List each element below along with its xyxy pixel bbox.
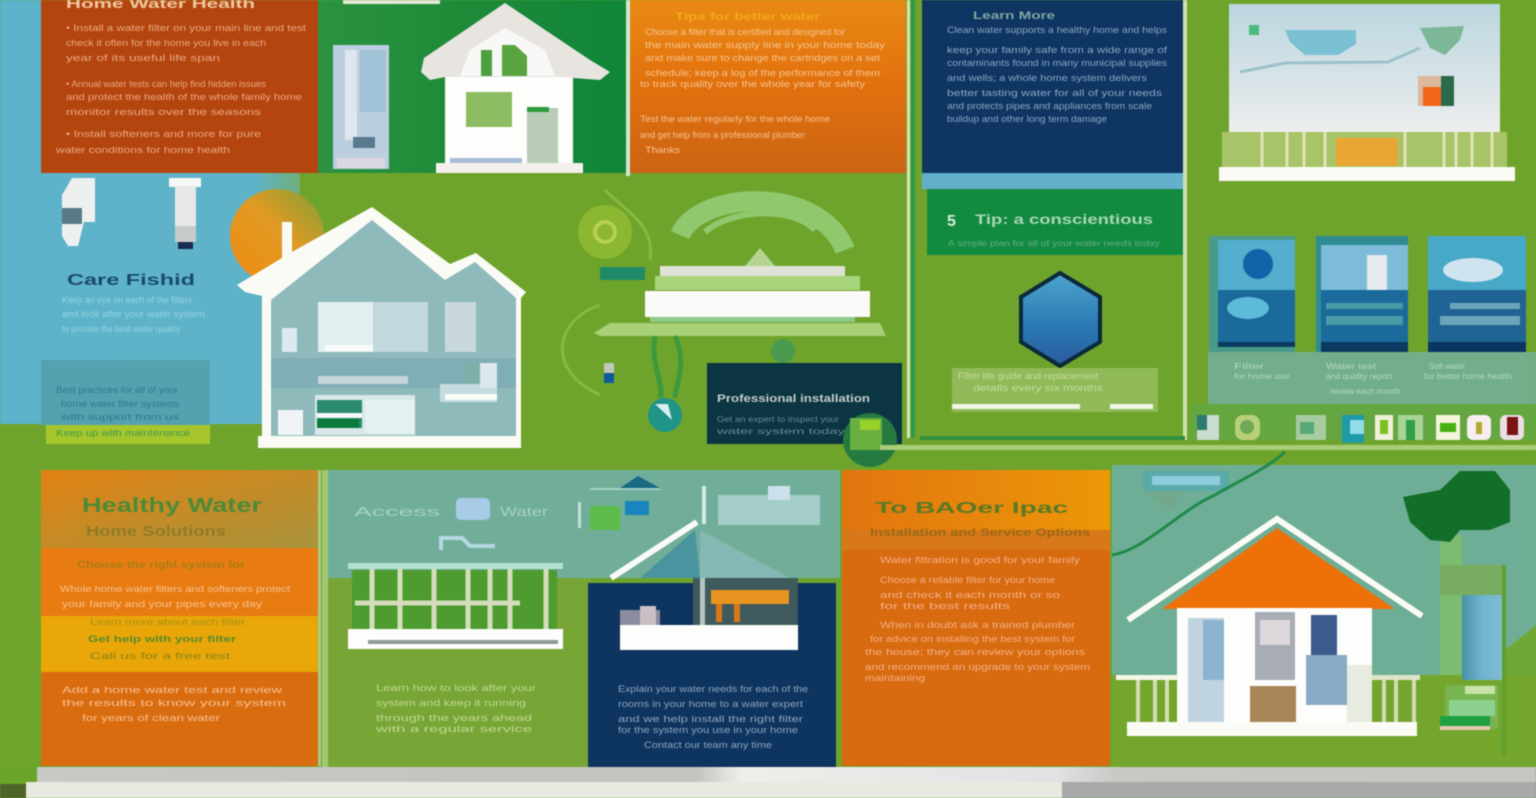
text: top orange: Choose a filter that is certified and designed for <box>645 27 845 37</box>
panel: dark callout: water system today <box>715 427 845 436</box>
panel: left blue <box>41 178 210 444</box>
icon: list <box>1296 415 1326 440</box>
heading: bottom orange right: To BAOer Ipac <box>875 500 1068 517</box>
panel: bottom orange left: Add a home water test and review <box>62 685 283 695</box>
icon: big translucent house <box>237 207 526 448</box>
panel: bottom orange right: When in doubt ask a trained plumber <box>880 620 1075 630</box>
box: notes: Best practices for all of your <box>56 385 178 395</box>
box: notes: with support from us <box>60 412 180 422</box>
icon: water tank <box>1440 565 1506 755</box>
heading: left blue: Care Fishid <box>67 272 195 289</box>
text: top orange: Tips for better water <box>675 11 821 23</box>
captions under cards: Filter <box>1234 362 1265 371</box>
panel: top red: year of its useful life span <box>66 53 220 63</box>
text: top orange: to track quality over the whole year for safety <box>640 79 866 89</box>
panel: bottom orange right: Choose a reliable filter for your home <box>880 575 1055 585</box>
panel: bottom teal: Access <box>354 504 441 519</box>
panel: top navy: keep your family safe from a wide range of <box>947 45 1168 55</box>
panel: left blue: Keep an eye on each of the filters <box>62 295 192 305</box>
icon: white house <box>421 3 610 173</box>
panel: top red: and protect the health of the whole family home <box>66 92 302 102</box>
text box: right green <box>952 368 1158 412</box>
panel: left blue: and look after your water system <box>62 309 205 319</box>
captions under cards: Soft water <box>1429 362 1465 371</box>
panel: top red: • Annual water tests can help find hidden issues <box>66 79 267 89</box>
panel: bottom teal: Water <box>500 504 549 519</box>
graphic: fence <box>348 563 563 649</box>
icon: green badge <box>843 413 897 467</box>
icon: red <box>1500 415 1524 440</box>
panel: top right window <box>1219 4 1515 181</box>
text box: right green: details every six months <box>973 383 1104 393</box>
captions under cards: and quality report <box>1326 372 1393 381</box>
text: fence caption: with a regular service <box>374 724 532 734</box>
text box: right green: Filter life guide and replacement <box>958 371 1099 381</box>
icon: sun <box>230 189 324 283</box>
icon: swirl platform <box>562 190 886 432</box>
icon: small chart <box>1418 76 1454 106</box>
panel: bottom orange right: for advice on installing the best system for <box>870 634 1075 644</box>
panel: bottom orange left: Call us for a free test <box>90 651 231 661</box>
box: notes: Keep up with maintenance <box>56 428 190 438</box>
panel: top orange <box>626 0 906 176</box>
panel: top navy: and wells; a whole home system delivers <box>947 73 1148 83</box>
panel: top red: check it often for the home you live in each <box>66 38 266 48</box>
panel: top red: • Install a water filter on your main line and test <box>66 23 307 33</box>
panel: top navy: contaminants found in many municipal supplies <box>947 58 1168 68</box>
captions under cards: for home use <box>1234 372 1291 381</box>
panel: green banner: A simple plan for all of your water needs today <box>948 239 1160 248</box>
captions under cards <box>1234 362 1512 396</box>
captions under cards: review each month <box>1330 387 1400 396</box>
panel: top navy: and protects pipes and appliances from scale <box>947 101 1152 111</box>
panel: green banner: Tip: a conscientious <box>975 211 1153 227</box>
panel: bottom orange right: the house; they can review your options <box>865 647 1086 657</box>
panel: bottom orange right: and recommend an upgrade to your system <box>865 662 1090 672</box>
icon: water filter device <box>333 45 389 169</box>
panel: bottom orange right <box>842 470 1110 766</box>
text: top orange: Thanks <box>645 145 681 155</box>
label: small tag <box>1143 471 1229 510</box>
panel: top navy <box>922 0 1183 173</box>
panel: navy bottom: and we help install the right filter <box>618 714 803 724</box>
text: fence caption: system and keep it running <box>376 698 526 708</box>
panel: bottom orange left: your family and your pipes every day <box>62 599 263 609</box>
panel: green banner: 5 <box>947 213 956 230</box>
panel: navy bottom <box>588 522 836 767</box>
icon: arrow <box>1436 415 1460 440</box>
panel: top navy: Learn More <box>973 10 1055 22</box>
icon: ring <box>1235 415 1260 440</box>
panel: bottom orange right: Installation and Service Options <box>870 527 1090 539</box>
icon: house roof <box>611 522 798 650</box>
icon: home <box>1197 415 1219 440</box>
icon: logo <box>456 498 490 520</box>
panel: top red <box>41 0 318 173</box>
captions band <box>1208 352 1536 406</box>
panel: navy bottom: rooms in your home to a water expert <box>618 699 804 709</box>
text: top orange <box>640 11 886 155</box>
panel: dark callout: Professional installation <box>717 393 870 405</box>
text: top orange: and make sure to change the cartridges on a set <box>645 53 881 63</box>
text: fence caption: Learn how to look after your <box>376 683 536 693</box>
icon: green box <box>1440 685 1498 730</box>
icon: orange roof house <box>1116 519 1422 736</box>
panel: top green house <box>318 0 628 173</box>
text: fence caption <box>374 683 536 734</box>
text: top orange: Test the water regularly for the whole home <box>640 114 830 124</box>
panel: left blue: to provide the best water quality <box>62 324 180 334</box>
panel: bottom orange left <box>41 470 318 766</box>
panel: bottom orange right: Water filtration is good for your family <box>880 555 1081 565</box>
icon: doc <box>1375 415 1393 440</box>
icon: leaf <box>1398 415 1423 440</box>
icon: tag <box>1467 415 1491 440</box>
panel: top red: • Install softeners and more for pure <box>66 129 261 139</box>
strip: blue <box>922 173 1183 189</box>
icon: hexagon <box>1021 273 1100 366</box>
captions under cards: for better home health <box>1424 372 1512 381</box>
panel: top red: monitor results over the seasons <box>66 107 262 117</box>
icon: water devices <box>62 178 201 249</box>
panel: top red: water conditions for home health <box>55 145 230 155</box>
box: notes <box>41 360 210 444</box>
icon: small house <box>578 476 706 530</box>
text: top orange: the main water supply line in your home today <box>645 40 886 50</box>
text: top orange: and get help from a professional plumber <box>640 130 805 140</box>
panel: top navy: better tasting water for all of your needs <box>947 88 1163 98</box>
panel: bottom orange left: Get help with your filter <box>88 634 237 644</box>
panel: bottom orange left: Home Solutions <box>86 523 226 540</box>
panel: bottom orange right: for the best results <box>880 601 1011 611</box>
panel: navy bottom: Explain your water needs for each of the <box>618 684 808 694</box>
text: fence caption: through the years ahead <box>376 713 532 723</box>
panel: bottom orange left: Choose the right system for <box>77 560 245 571</box>
panel: bottom teal <box>318 470 840 768</box>
icon: tree <box>1403 471 1510 675</box>
panel: navy bottom: for the system you use in your home <box>618 725 798 735</box>
panel: dark callout <box>707 363 902 444</box>
card: blue 2 <box>1316 236 1408 352</box>
text: top orange: schedule; keep a log of the performance of them <box>645 68 880 78</box>
card: blue 3 <box>1428 236 1526 352</box>
panel: bottom orange right: and check it each month or so <box>880 590 1060 600</box>
box: notes: home water filter systems <box>61 399 180 409</box>
graphic: right mini chart <box>718 495 820 525</box>
icon: drop <box>1342 415 1364 443</box>
panel: dark callout: Get an expert to inspect your <box>717 415 839 424</box>
strip: bottom white <box>0 766 1536 798</box>
panel: bottom orange left: for years of clean water <box>82 713 220 723</box>
panel: bottom orange left: Whole home water filters and softeners protect <box>60 584 291 594</box>
icon row <box>1190 404 1536 443</box>
panel: green banner <box>927 189 1183 255</box>
panel: bottom orange right: maintaining <box>865 673 925 683</box>
panel: navy bottom: Contact our team any time <box>644 740 772 750</box>
panel: top navy: buildup and other long term damage <box>947 114 1107 124</box>
panel: bottom orange left: Learn more about each filter <box>90 617 245 627</box>
panel: top navy: Clean water supports a healthy home and helps <box>947 25 1168 35</box>
panel: bottom orange left: the results to know your system <box>62 698 286 708</box>
icon: faucet <box>441 538 495 550</box>
captions under cards: Water test <box>1326 362 1377 371</box>
panel: bottom right teal <box>1112 452 1536 767</box>
heading: bottom orange left: Healthy Water <box>82 495 262 517</box>
card: blue 1 <box>1209 236 1295 352</box>
icon: globe <box>648 398 682 432</box>
